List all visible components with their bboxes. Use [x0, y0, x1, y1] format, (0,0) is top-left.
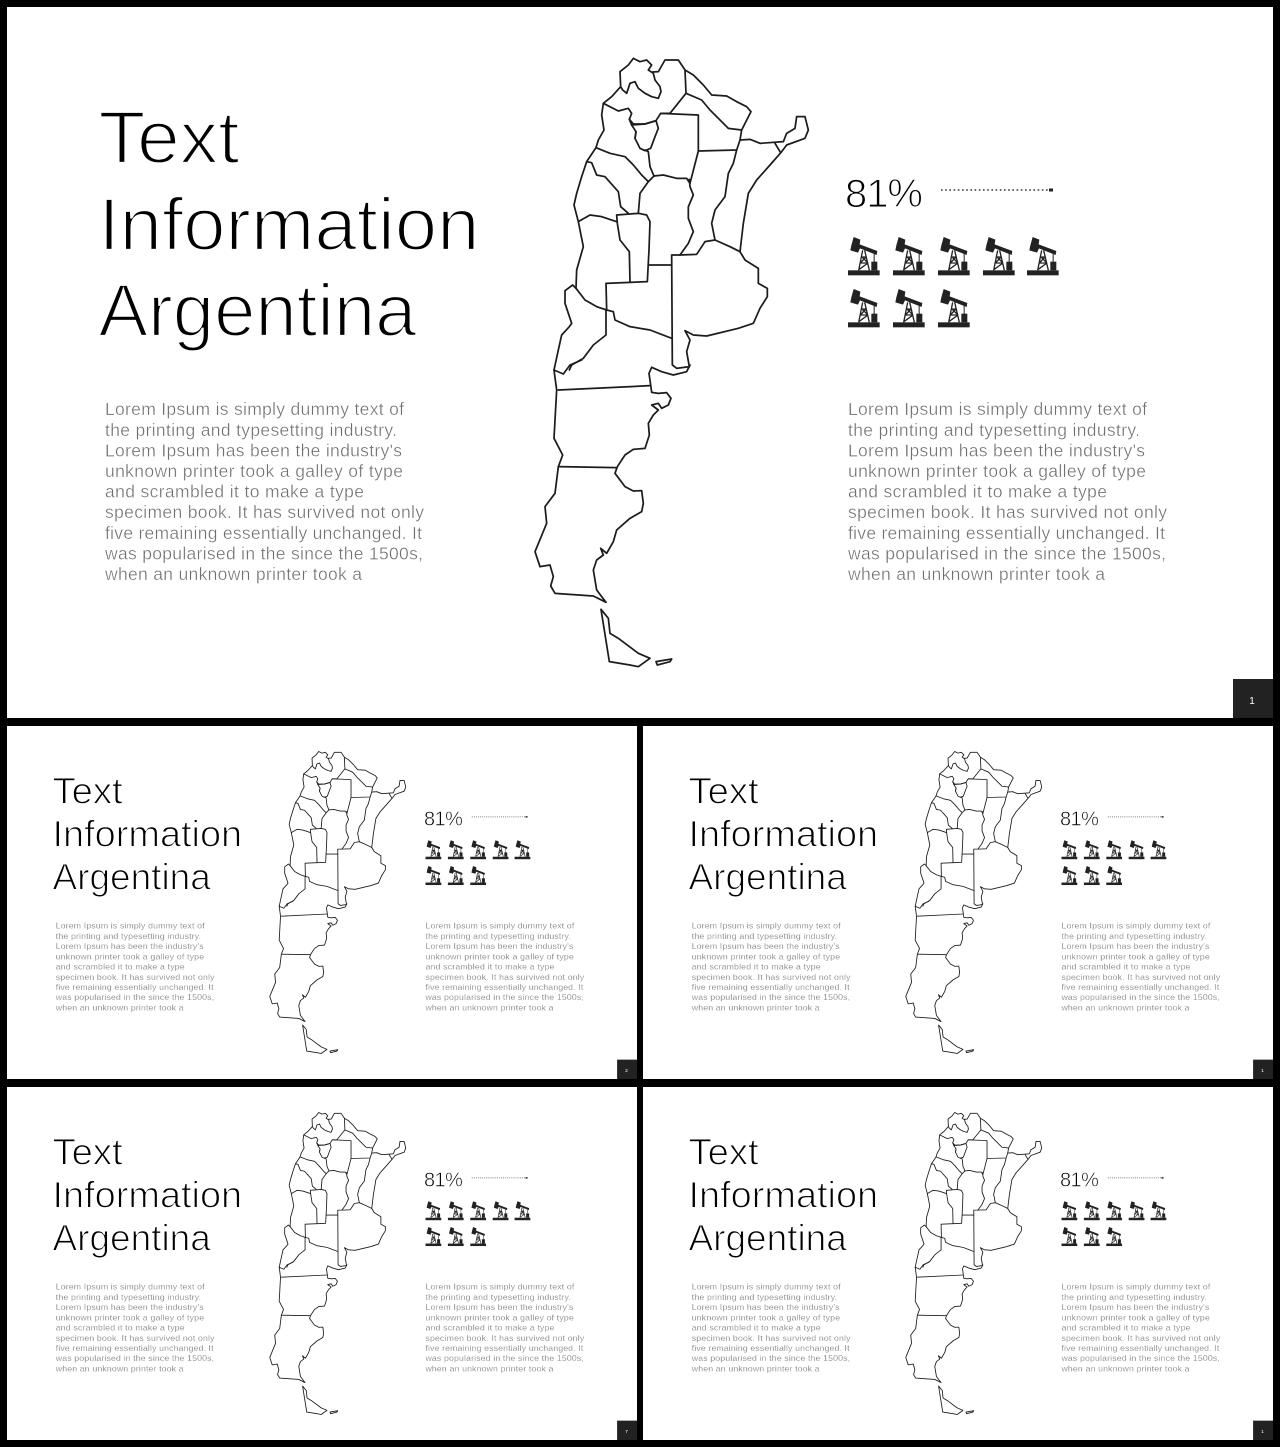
- left text block: when an unknown printer took a: [691, 1002, 820, 1012]
- left text block: [55, 1282, 215, 1373]
- left text block: [691, 1282, 851, 1373]
- right text block: was popularised in the since the 1500s,: [425, 992, 584, 1002]
- right text block: [847, 399, 1167, 584]
- dotted arrow: [941, 188, 1053, 192]
- title: Text: [689, 770, 759, 811]
- left text block: when an unknown printer took a: [55, 1002, 184, 1012]
- left text block: unknown printer took a galley of type: [56, 1312, 204, 1322]
- page number: 2: [625, 1068, 628, 1074]
- title: Information: [53, 814, 242, 855]
- left text block: Lorem Ipsum has been the industry's: [56, 941, 204, 951]
- title: Text: [98, 96, 240, 179]
- right text block: was popularised in the since the 1500s,: [847, 543, 1166, 563]
- title: Text: [53, 1131, 123, 1172]
- oil pump icons: [848, 237, 1059, 327]
- left text block: five remaining essentially unchanged. It: [692, 1343, 850, 1353]
- map of Argentina: [906, 1112, 1042, 1415]
- right text block: unknown printer took a galley of type: [848, 461, 1146, 481]
- left text block: the printing and typesetting industry.: [56, 931, 201, 941]
- slide 2: small panel top left: [7, 726, 637, 1079]
- right text block: was popularised in the since the 1500s,: [425, 1353, 584, 1363]
- right text block: five remaining essentially unchanged. It: [426, 1343, 584, 1353]
- right text block: five remaining essentially unchanged. It: [1062, 1343, 1220, 1353]
- title: Information: [689, 1175, 878, 1216]
- right text block: was popularised in the since the 1500s,: [1061, 992, 1220, 1002]
- dotted arrow: [1108, 816, 1164, 818]
- left text block: specimen book. It has survived not only: [692, 972, 851, 982]
- left text block: was popularised in the since the 1500s,: [55, 992, 214, 1002]
- right text block: and scrambled it to make a type: [426, 962, 555, 972]
- right text block: and scrambled it to make a type: [426, 1323, 555, 1333]
- right text block: Lorem Ipsum is simply dummy text of: [1062, 1282, 1211, 1292]
- right text block: when an unknown printer took a: [847, 564, 1105, 584]
- left text block: the printing and typesetting industry.: [56, 1292, 201, 1302]
- title: Information: [689, 814, 878, 855]
- right text block: the printing and typesetting industry.: [426, 931, 571, 941]
- right text block: [425, 921, 585, 1012]
- right text block: five remaining essentially unchanged. It: [426, 982, 584, 992]
- page number: 1: [1249, 696, 1255, 707]
- left text block: five remaining essentially unchanged. It: [692, 982, 850, 992]
- left text block: Lorem Ipsum is simply dummy text of: [692, 1282, 841, 1292]
- right text block: when an unknown printer took a: [1061, 1002, 1190, 1012]
- left text block: unknown printer took a galley of type: [56, 951, 204, 961]
- right text block: the printing and typesetting industry.: [1062, 1292, 1207, 1302]
- slide 4: small panel bottom left: [7, 1087, 637, 1440]
- title: Text: [689, 1131, 759, 1172]
- right text block: specimen book. It has survived not only: [848, 502, 1167, 522]
- left text block: was popularised in the since the 1500s,: [55, 1353, 214, 1363]
- title: [53, 1131, 242, 1258]
- dotted arrow: [1108, 1177, 1164, 1179]
- percentage label: 81%: [1060, 1169, 1099, 1191]
- left text block: and scrambled it to make a type: [56, 1323, 185, 1333]
- right text block: Lorem Ipsum is simply dummy text of: [426, 1282, 575, 1292]
- left text block: the printing and typesetting industry.: [692, 1292, 837, 1302]
- left text block: unknown printer took a galley of type: [692, 951, 840, 961]
- map of Argentina: [270, 1112, 406, 1415]
- left text block: Lorem Ipsum is simply dummy text of: [56, 921, 205, 931]
- title: Argentina: [689, 1217, 847, 1258]
- percentage label: 81%: [1060, 808, 1099, 830]
- slide 5: small panel bottom right: [643, 1087, 1273, 1440]
- left text block: five remaining essentially unchanged. It: [56, 1343, 214, 1353]
- title: Information: [53, 1175, 242, 1216]
- right text block: [425, 1282, 585, 1373]
- right text block: unknown printer took a galley of type: [1062, 951, 1210, 961]
- right text block: Lorem Ipsum is simply dummy text of: [426, 921, 575, 931]
- right text block: specimen book. It has survived not only: [426, 972, 585, 982]
- right text block: was popularised in the since the 1500s,: [1061, 1353, 1220, 1363]
- percentage label: 81%: [424, 1169, 463, 1191]
- oil pump icons: [426, 1201, 530, 1246]
- right text block: five remaining essentially unchanged. It: [848, 523, 1165, 543]
- left text block: Lorem Ipsum is simply dummy text of: [56, 1282, 205, 1292]
- left text block: specimen book. It has survived not only: [692, 1333, 851, 1343]
- left text block: and scrambled it to make a type: [56, 962, 185, 972]
- page number: [1233, 679, 1273, 718]
- left text block: unknown printer took a galley of type: [692, 1312, 840, 1322]
- left text block: [55, 921, 215, 1012]
- right text block: and scrambled it to make a type: [1062, 1323, 1191, 1333]
- right text block: [1061, 921, 1221, 1012]
- right text block: Lorem Ipsum is simply dummy text of: [1062, 921, 1211, 931]
- left text block: and scrambled it to make a type: [692, 962, 821, 972]
- right text block: specimen book. It has survived not only: [1062, 972, 1221, 982]
- right text block: the printing and typesetting industry.: [848, 420, 1140, 440]
- right text block: unknown printer took a galley of type: [1062, 1312, 1210, 1322]
- right text block: Lorem Ipsum has been the industry's: [848, 440, 1145, 460]
- right text block: specimen book. It has survived not only: [1062, 1333, 1221, 1343]
- right text block: and scrambled it to make a type: [1062, 962, 1191, 972]
- page number: [617, 1060, 637, 1079]
- left text block: specimen book. It has survived not only: [56, 1333, 215, 1343]
- slide 1: large panel: [7, 7, 1273, 718]
- percentage label: 81%: [424, 808, 463, 830]
- left text block: the printing and typesetting industry.: [105, 420, 397, 440]
- left text block: Lorem Ipsum is simply dummy text of: [105, 399, 404, 419]
- page number: 1: [1261, 1429, 1264, 1435]
- left text block: when an unknown printer took a: [691, 1363, 820, 1373]
- right text block: and scrambled it to make a type: [848, 482, 1107, 502]
- left text block: five remaining essentially unchanged. It: [105, 523, 422, 543]
- dotted arrow: [472, 816, 528, 818]
- left text block: five remaining essentially unchanged. It: [56, 982, 214, 992]
- title: Argentina: [53, 1217, 211, 1258]
- percentage label: 81%: [845, 172, 923, 216]
- right text block: [1061, 1282, 1221, 1373]
- oil pump icons: [1062, 840, 1166, 885]
- left text block: specimen book. It has survived not only: [56, 972, 215, 982]
- left text block: specimen book. It has survived not only: [105, 502, 424, 522]
- title: [53, 770, 242, 897]
- page number: [1253, 1060, 1273, 1079]
- map of Argentina: [906, 751, 1042, 1054]
- title: Argentina: [98, 269, 417, 352]
- right text block: Lorem Ipsum has been the industry's: [426, 941, 574, 951]
- left text block: Lorem Ipsum has been the industry's: [692, 1302, 840, 1312]
- slide 3: small panel top right: [643, 726, 1273, 1079]
- right text block: unknown printer took a galley of type: [426, 951, 574, 961]
- title: [98, 96, 480, 352]
- left text block: was popularised in the since the 1500s,: [691, 1353, 850, 1363]
- oil pump icons: [1062, 1201, 1166, 1246]
- title: [689, 1131, 878, 1258]
- left text block: [691, 921, 851, 1012]
- title: [689, 770, 878, 897]
- title: Text: [53, 770, 123, 811]
- left text block: Lorem Ipsum has been the industry's: [692, 941, 840, 951]
- left text block: was popularised in the since the 1500s,: [691, 992, 850, 1002]
- page number: 1: [1261, 1068, 1264, 1074]
- right text block: Lorem Ipsum has been the industry's: [1062, 941, 1210, 951]
- map of Argentina: [535, 58, 808, 667]
- right text block: Lorem Ipsum has been the industry's: [1062, 1302, 1210, 1312]
- oil pump icons: [426, 840, 530, 885]
- left text block: was popularised in the since the 1500s,: [104, 543, 423, 563]
- right text block: when an unknown printer took a: [425, 1363, 554, 1373]
- page number: [617, 1421, 637, 1440]
- left text block: Lorem Ipsum has been the industry's: [105, 440, 402, 460]
- right text block: the printing and typesetting industry.: [426, 1292, 571, 1302]
- right text block: unknown printer took a galley of type: [426, 1312, 574, 1322]
- left text block: and scrambled it to make a type: [692, 1323, 821, 1333]
- left text block: the printing and typesetting industry.: [692, 931, 837, 941]
- page number: [1253, 1421, 1273, 1440]
- right text block: when an unknown printer took a: [425, 1002, 554, 1012]
- right text block: the printing and typesetting industry.: [1062, 931, 1207, 941]
- right text block: specimen book. It has survived not only: [426, 1333, 585, 1343]
- title: Argentina: [53, 856, 211, 897]
- dotted arrow: [472, 1177, 528, 1179]
- left text block: when an unknown printer took a: [55, 1363, 184, 1373]
- left text block: unknown printer took a galley of type: [105, 461, 403, 481]
- map of Argentina: [270, 751, 406, 1054]
- right text block: five remaining essentially unchanged. It: [1062, 982, 1220, 992]
- right text block: when an unknown printer took a: [1061, 1363, 1190, 1373]
- left text block: Lorem Ipsum has been the industry's: [56, 1302, 204, 1312]
- right text block: Lorem Ipsum has been the industry's: [426, 1302, 574, 1312]
- left text block: when an unknown printer took a: [104, 564, 362, 584]
- left text block: Lorem Ipsum is simply dummy text of: [692, 921, 841, 931]
- right text block: Lorem Ipsum is simply dummy text of: [848, 399, 1147, 419]
- title: Information: [98, 183, 480, 266]
- title: Argentina: [689, 856, 847, 897]
- page number: 7: [625, 1429, 628, 1435]
- left text block: [104, 399, 424, 584]
- left text block: and scrambled it to make a type: [105, 482, 364, 502]
